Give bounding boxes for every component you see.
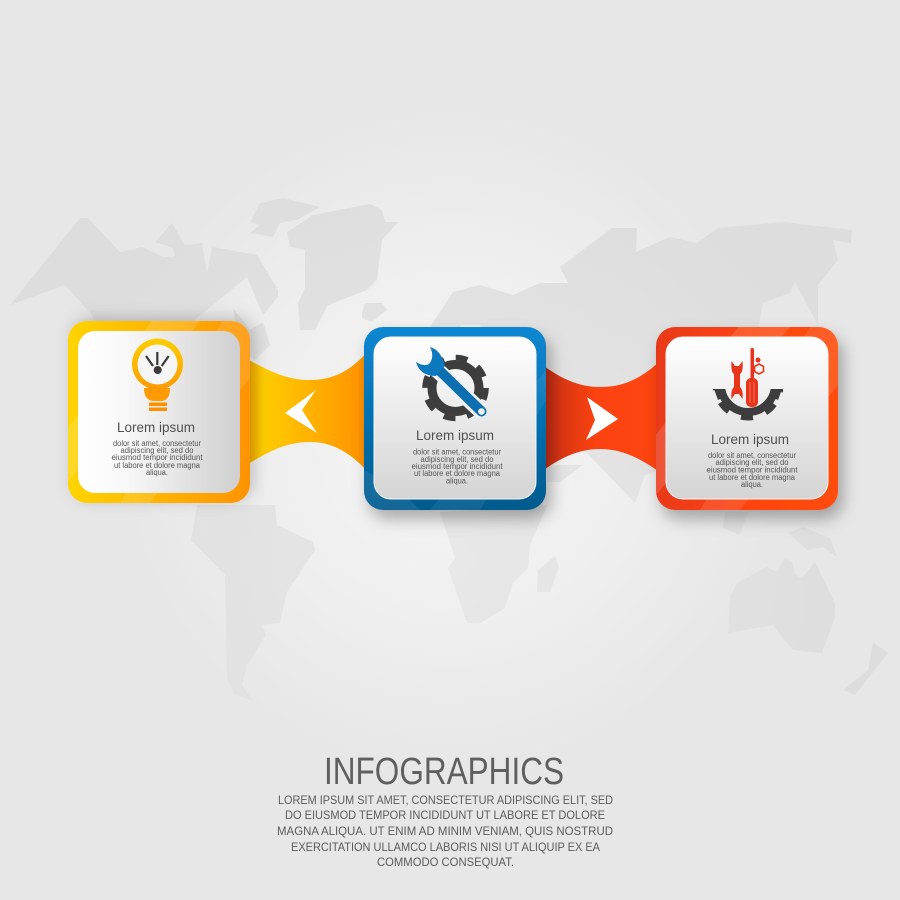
card text	[112, 439, 203, 477]
card text: ut labore et dolore magna	[414, 469, 501, 478]
card text: dolor sit amet, consectetur	[413, 448, 501, 456]
icon: tools and half gear	[714, 348, 782, 418]
icon: gear and wrench	[416, 347, 486, 418]
card text: dolor sit amet, consectetur	[708, 451, 796, 460]
world map	[10, 198, 888, 700]
icon: light bulb	[132, 338, 183, 411]
card text: dolor sit amet, consectetur	[113, 439, 201, 448]
card text: ut labore et dolore magna	[114, 461, 201, 470]
map: greenland	[287, 204, 398, 330]
map: madagascar	[537, 556, 559, 592]
card title: Lorem ipsum	[711, 431, 789, 447]
map: new zealand	[843, 642, 888, 695]
map: arctic island	[250, 198, 320, 237]
card text: eiusmod tempor incididunt	[706, 466, 798, 474]
connector: yellow to orange band	[245, 350, 369, 473]
blue frame	[364, 327, 546, 510]
red frame	[656, 327, 838, 510]
card text	[706, 451, 798, 489]
card text: aliqua.	[146, 468, 168, 477]
map: iceland	[362, 303, 387, 322]
map: indonesia	[788, 527, 837, 557]
card text: adipiscing elit, sed do	[120, 446, 194, 455]
panel: idea card	[68, 321, 250, 503]
card text: aliqua.	[446, 476, 468, 486]
connector: red band	[541, 360, 661, 473]
map: australia	[728, 557, 835, 653]
map: central america	[233, 308, 270, 360]
map: africa	[440, 505, 547, 623]
main heading: INFOGRAPHICS	[324, 751, 564, 793]
arrow: left pointing	[285, 390, 317, 433]
body paragraph	[277, 793, 613, 869]
body paragraph: LOREM IPSUM SIT AMET, CONSECTETUR ADIPISCING ELIT, SED	[278, 793, 613, 807]
frame glass highlights	[68, 321, 250, 503]
map: southeast asia	[723, 512, 748, 535]
card title: Lorem ipsum	[117, 419, 195, 435]
map: south america	[191, 505, 315, 700]
panel: tools card	[656, 327, 838, 510]
card title: Lorem ipsum	[416, 427, 494, 443]
card text: adipiscing elit, sed do	[420, 455, 494, 464]
map: arabia fragment	[547, 465, 583, 482]
body paragraph: DO EIUSMOD TEMPOR INCIDIDUNT UT LABORE ET DOLORE	[285, 808, 605, 822]
arrow: right pointing	[586, 397, 618, 440]
map: eurasia	[430, 222, 852, 503]
panel: settings card	[364, 327, 546, 510]
body paragraph: COMMODO CONSEQUAT.	[377, 855, 514, 869]
card text: eiusmod tempor incididunt	[112, 453, 203, 462]
card text: eiusmod tempor incididunt	[412, 462, 503, 471]
body paragraph: EXERCITATION ULLAMCO LABORIS NISI UT ALIQUIP EX EA	[291, 840, 600, 854]
body paragraph: MAGNA ALIQUA. UT ENIM AD MINIM VENIAM, QUIS NOSTRUD	[277, 824, 613, 838]
inner white panel	[374, 337, 536, 499]
card text	[412, 448, 503, 486]
inner white panel	[78, 331, 240, 493]
yellow frame	[68, 321, 250, 503]
inner white panel	[666, 337, 828, 499]
frame glass highlights	[364, 370, 546, 510]
map: north america	[10, 218, 278, 335]
card text: aliqua.	[741, 480, 763, 489]
frame glass highlights	[656, 327, 838, 510]
card text: adipiscing elit, sed do	[716, 458, 789, 467]
card text: ut labore et dolore magna	[709, 473, 796, 482]
